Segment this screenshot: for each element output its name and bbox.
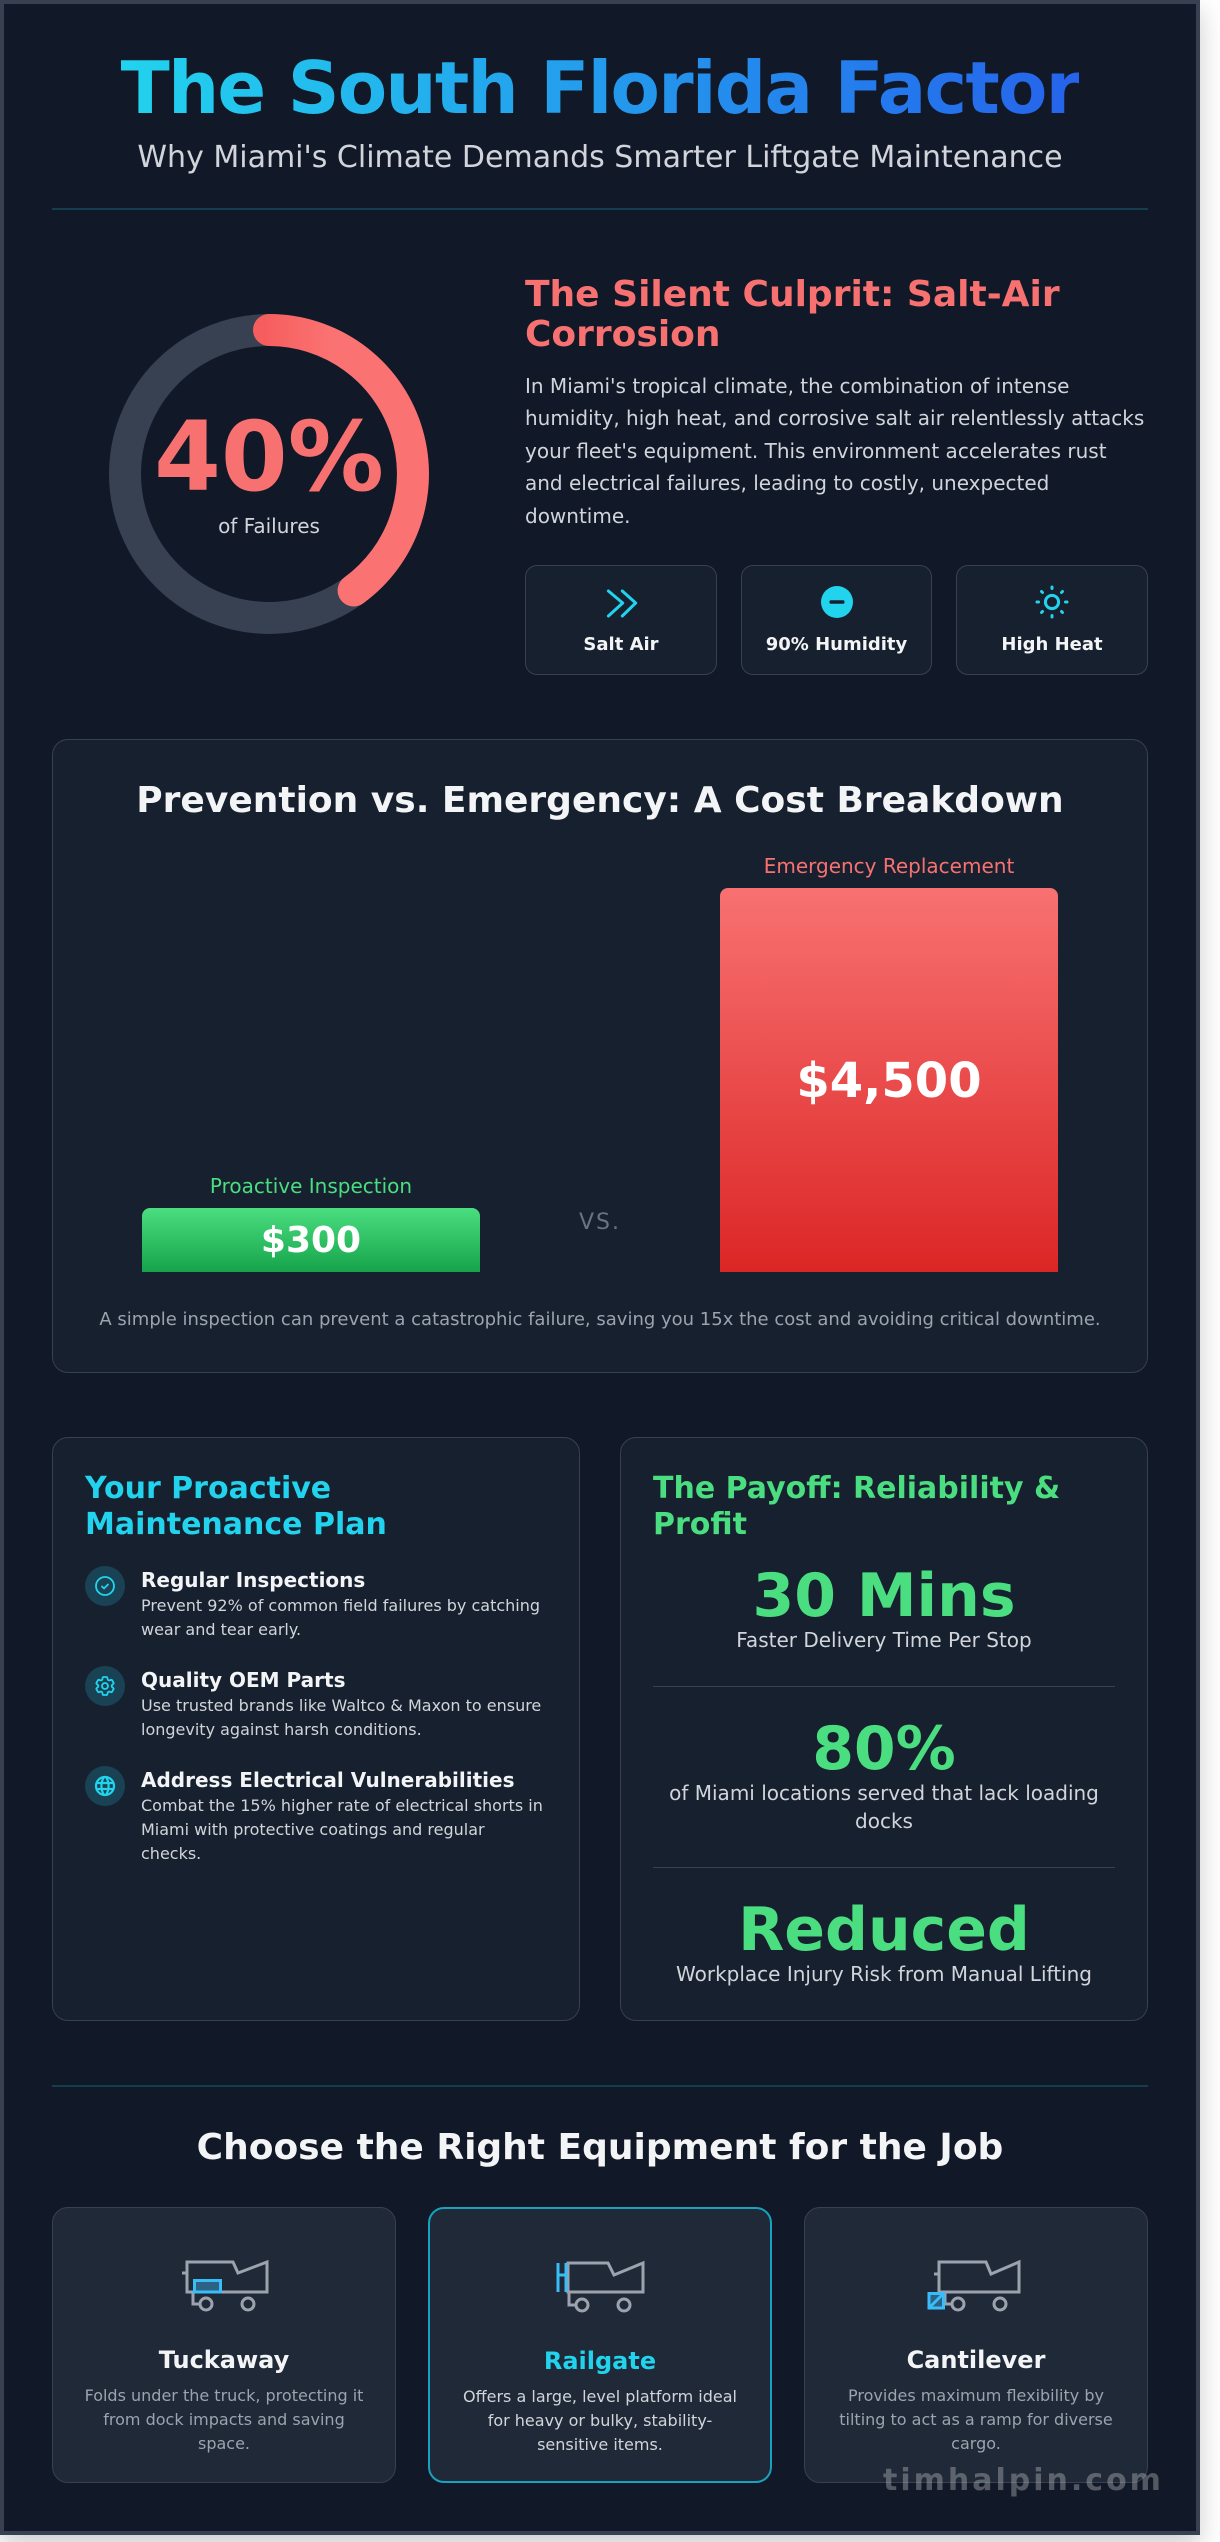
icon: check circle — [85, 1566, 125, 1606]
bar: emergency $4,500: $4,500 — [796, 1053, 982, 1109]
bar label: proactive: Proactive Inspection — [210, 1174, 412, 1198]
heading: silent culprit: Corrosion — [525, 314, 721, 355]
card title: Cantilever — [907, 2346, 1045, 2374]
heading: maintenance plan: Maintenance Plan — [85, 1507, 387, 1542]
stat: 30 mins — [736, 1561, 1032, 1652]
card: railgate — [428, 2207, 772, 2483]
plan item: electrical — [141, 1768, 543, 1863]
heading: silent culprit: The Silent Culprit: Salt-Air — [525, 274, 1060, 315]
donut caption: of Failures — [218, 514, 320, 538]
bar label: emergency: Emergency Replacement — [764, 854, 1014, 878]
stat: reduced: Workplace Injury Risk from Manual Lifting — [676, 1962, 1092, 1986]
plan item: inspections: Prevent 92% of common field failures by catching — [141, 1596, 540, 1615]
stat: 80%: 80% — [812, 1714, 956, 1784]
fact card: salt air — [525, 565, 717, 675]
card text: Folds under the truck, protecting it — [85, 2386, 363, 2405]
card text — [463, 2387, 737, 2454]
card text: from dock impacts and saving — [103, 2410, 345, 2429]
heading: payoff: The Payoff: Reliability & — [653, 1471, 1060, 1506]
bar: emergency $4,500 — [720, 888, 1058, 1272]
paragraph: climate — [525, 374, 1144, 528]
card text: cargo. — [951, 2434, 1001, 2453]
paragraph: climate: and electrical failures, leading to costly, unexpected — [525, 471, 1049, 495]
heading: silent culprit — [525, 274, 1060, 355]
heading: equipment: Choose the Right Equipment for the Job — [197, 2127, 1003, 2168]
donut value: 40% — [154, 401, 384, 513]
paragraph: climate: your fleet's equipment. This environment accelerates rust — [525, 439, 1107, 463]
bar: proactive $300: $300 — [261, 1220, 361, 1261]
panel: maintenance plan — [52, 1437, 580, 2021]
plan item: OEM parts — [141, 1668, 541, 1739]
paragraph: climate: humidity, high heat, and corrosive salt air relentlessly attacks — [525, 406, 1144, 430]
heading: cost breakdown: Prevention vs. Emergency: A Cost Breakdown — [136, 780, 1064, 821]
icon: sun — [1036, 586, 1068, 618]
chart caption: A simple inspection can prevent a catastrophic failure, saving you 15x the cost and avoiding critical downtime. — [99, 1309, 1101, 1330]
fact card: humidity — [741, 565, 932, 675]
heading: payoff: Profit — [653, 1507, 747, 1542]
plan item: electrical: Address Electrical Vulnerabilities — [141, 1768, 514, 1792]
heading: maintenance plan: Your Proactive — [85, 1471, 331, 1506]
plan item: OEM parts: Quality OEM Parts — [141, 1668, 345, 1692]
stat: 80% — [669, 1714, 1099, 1833]
card title: Railgate — [544, 2347, 656, 2375]
plan item: electrical: Combat the 15% higher rate of electrical shorts in — [141, 1796, 543, 1815]
label: High Heat — [1001, 634, 1103, 655]
stat: 80%: docks — [855, 1809, 913, 1833]
paragraph: climate: In Miami's tropical climate, the combination of intense — [525, 374, 1069, 398]
panel: payoff — [620, 1437, 1148, 2021]
icon: minus circle — [821, 586, 853, 618]
icon: truck with railgate — [556, 2260, 644, 2312]
donut chart: 40% of failures — [109, 314, 429, 634]
icon: truck with tuckaway liftgate — [182, 2260, 268, 2312]
card text: tilting to act as a ramp for diverse — [839, 2410, 1113, 2429]
plan item: inspections: Regular Inspections — [141, 1568, 365, 1592]
card text: for heavy or bulky, stability- — [488, 2411, 712, 2430]
paragraph: climate: downtime. — [525, 504, 631, 528]
plan item: inspections: wear and tear early. — [141, 1620, 301, 1639]
card text: Offers a large, level platform ideal — [463, 2387, 737, 2406]
heading: maintenance plan — [84, 1471, 387, 1542]
plan item: electrical: checks. — [141, 1844, 201, 1863]
vs label: VS. — [579, 1210, 621, 1235]
label: Salt Air — [583, 634, 659, 655]
watermark: timhalpin.com — [883, 2463, 1164, 2498]
card text — [839, 2386, 1113, 2453]
fact card: heat — [956, 565, 1148, 675]
subtitle: Why Miami's Climate Demands Smarter Liftgate Maintenance — [137, 140, 1063, 175]
stat: reduced — [676, 1895, 1092, 1986]
stat: 30 mins: 30 Mins — [752, 1561, 1016, 1631]
plan item: electrical: Miami with protective coatings and regular — [141, 1820, 485, 1839]
card title: Tuckaway — [159, 2346, 289, 2374]
icon: globe — [85, 1766, 125, 1806]
plan item: OEM parts: Use trusted brands like Waltco & Maxon to ensure — [141, 1696, 541, 1715]
card text: space. — [198, 2434, 250, 2453]
heading: payoff — [653, 1471, 1060, 1542]
icon: gear — [85, 1666, 125, 1706]
card: tuckaway — [52, 2207, 396, 2483]
label: 90% Humidity — [766, 634, 907, 655]
card text: Provides maximum flexibility by — [848, 2386, 1104, 2405]
card: cantilever — [804, 2207, 1148, 2483]
card text — [85, 2386, 363, 2453]
stat: 80%: of Miami locations served that lack loading — [669, 1781, 1099, 1805]
card text: sensitive items. — [537, 2435, 663, 2454]
panel: cost breakdown — [52, 739, 1148, 1373]
title: The South Florida Factor — [121, 46, 1079, 130]
icon: truck with cantilever liftgate — [928, 2260, 1020, 2312]
stat: reduced: Reduced — [738, 1895, 1030, 1965]
stat: 30 mins: Faster Delivery Time Per Stop — [736, 1628, 1032, 1652]
icon: double chevrons — [606, 589, 638, 618]
plan item: OEM parts: longevity against harsh conditions. — [141, 1720, 422, 1739]
bar: proactive $300 — [142, 1208, 480, 1272]
plan item: inspections — [141, 1568, 540, 1639]
